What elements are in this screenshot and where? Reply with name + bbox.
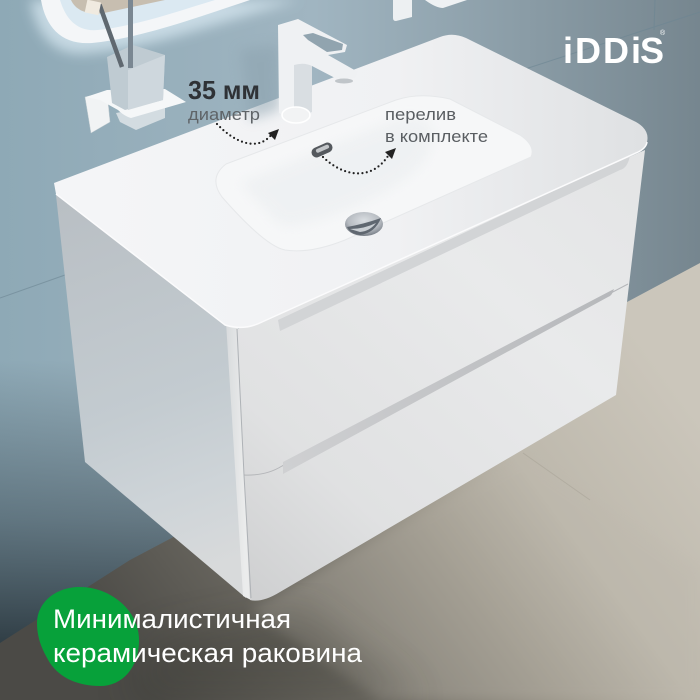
aerator [335, 78, 353, 84]
bowl inner shade [240, 118, 433, 225]
green blob [37, 587, 139, 686]
faucet [240, 19, 358, 123]
backlit mirror [30, 0, 300, 54]
cabinet corner strip [226, 322, 251, 600]
callout: overflow included [323, 105, 488, 173]
corner seam [237, 329, 251, 598]
logo: iDDiS [563, 30, 664, 71]
logo: ® [660, 29, 666, 37]
value: 35 мм [188, 75, 260, 105]
heading [53, 604, 363, 668]
cabinet side [56, 195, 246, 598]
drawer handle groove lower [283, 289, 614, 474]
toothbrush glass on shelf [85, 0, 186, 133]
icon: overflow [310, 141, 334, 159]
ceramic countertop basin [54, 35, 648, 327]
callout: 35 mm diameter [188, 75, 279, 144]
faucet body shade [294, 64, 312, 118]
icon: toothbrushes [85, 0, 133, 68]
icon: wall bracket [85, 92, 110, 133]
sink bowl [216, 96, 532, 251]
arrow: dotted from overflow [323, 148, 396, 173]
icon: shelf plate [86, 89, 186, 118]
caption second line: в комплекте [385, 127, 488, 146]
faucet shadow [240, 45, 280, 120]
heading: керамическая раковина [53, 638, 363, 668]
icon: drain [345, 212, 383, 236]
caption: перелив [385, 105, 456, 124]
diameter ring [282, 107, 310, 123]
arrow: dotted to faucet base [217, 124, 279, 144]
drawer handle groove upper [278, 155, 630, 331]
countertop front edge [56, 142, 647, 327]
vanity cabinet [56, 150, 645, 601]
cabinet front [237, 150, 645, 601]
heading: Минималистичная [53, 604, 291, 634]
icon: glass [107, 45, 165, 110]
icon: glass face [128, 55, 165, 110]
caption: диаметр [188, 105, 260, 124]
countertop [54, 35, 648, 327]
icon: lower glass [116, 104, 165, 130]
faucet silhouette [278, 19, 358, 119]
floor [0, 263, 700, 700]
lever opening [303, 33, 343, 52]
wall accessories top [393, 0, 467, 21]
drawer seam [244, 284, 628, 475]
